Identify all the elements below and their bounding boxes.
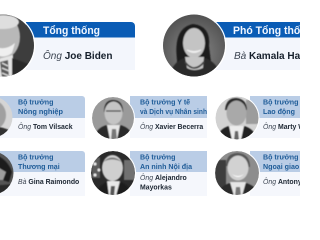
panel: vice president	[163, 14, 300, 76]
photo ring: Antony Blinken	[214, 150, 260, 196]
vice president card	[215, 22, 300, 70]
heading: homeland security: Bộ trưởng	[140, 154, 175, 162]
photo: Kamala Harris	[163, 14, 225, 80]
photo: Antony Blinken	[215, 151, 259, 196]
heading: health: và Dịch vụ Nhân sinh	[140, 108, 207, 116]
name: Alejandro Mayorkas: Mayorkas	[140, 184, 172, 192]
heading: labor: Bộ trưởng	[263, 98, 298, 106]
name: Joe Biden: Ông Joe Biden	[43, 49, 112, 62]
health card	[130, 96, 207, 138]
photo: Joe Biden	[0, 14, 34, 76]
name: Xavier Becerra: Ông Xavier Becerra	[140, 122, 203, 131]
photo: Tom Vilsack	[0, 98, 12, 136]
photo ring: Joe Biden	[0, 14, 35, 77]
photo: Marty Walsh	[215, 96, 259, 140]
photo: Xavier Becerra	[92, 97, 134, 140]
heading: agriculture: Bộ trưởng	[18, 98, 53, 106]
president card	[26, 22, 135, 70]
homeland security card	[130, 151, 207, 196]
panel: commerce	[0, 151, 85, 196]
photo: Gina Raimondo	[0, 153, 14, 193]
labor card	[250, 96, 300, 138]
panel: homeland security	[90, 150, 207, 196]
photo ring: Kamala Harris	[162, 14, 226, 77]
agriculture card	[0, 96, 85, 138]
heading: state: Bộ trưởng	[263, 154, 298, 162]
photo: Alejandro Mayorkas	[91, 151, 135, 196]
panel: state	[215, 151, 300, 196]
name: Gina Raimondo: Bà Gina Raimondo	[18, 179, 79, 186]
heading: labor: Lao động	[263, 108, 295, 116]
panel: labor	[216, 96, 300, 140]
heading: health: Bộ trưởng Y tế	[140, 98, 190, 106]
heading: agriculture: Nông nghiệp	[18, 108, 64, 116]
heading: state: Ngoại giao	[263, 163, 300, 171]
heading: commerce: Thương mại	[18, 163, 60, 171]
panel: agriculture	[0, 96, 85, 138]
name: Tom Vilsack: Ông Tom Vilsack	[18, 122, 73, 131]
photo ring: Alejandro Mayorkas	[90, 150, 136, 196]
state card	[250, 151, 300, 196]
panel: president	[0, 14, 135, 80]
heading: homeland security: An ninh Nội địa	[140, 163, 192, 171]
panel: health	[92, 96, 207, 140]
photo ring: Marty Walsh	[215, 96, 259, 140]
commerce card	[0, 151, 85, 196]
photo ring: Xavier Becerra	[92, 96, 134, 140]
name: Alejandro Mayorkas: Ông Alejandro	[140, 175, 187, 182]
heading: commerce: Bộ trưởng	[18, 154, 53, 162]
heading: president: Tổng thống	[43, 25, 100, 37]
